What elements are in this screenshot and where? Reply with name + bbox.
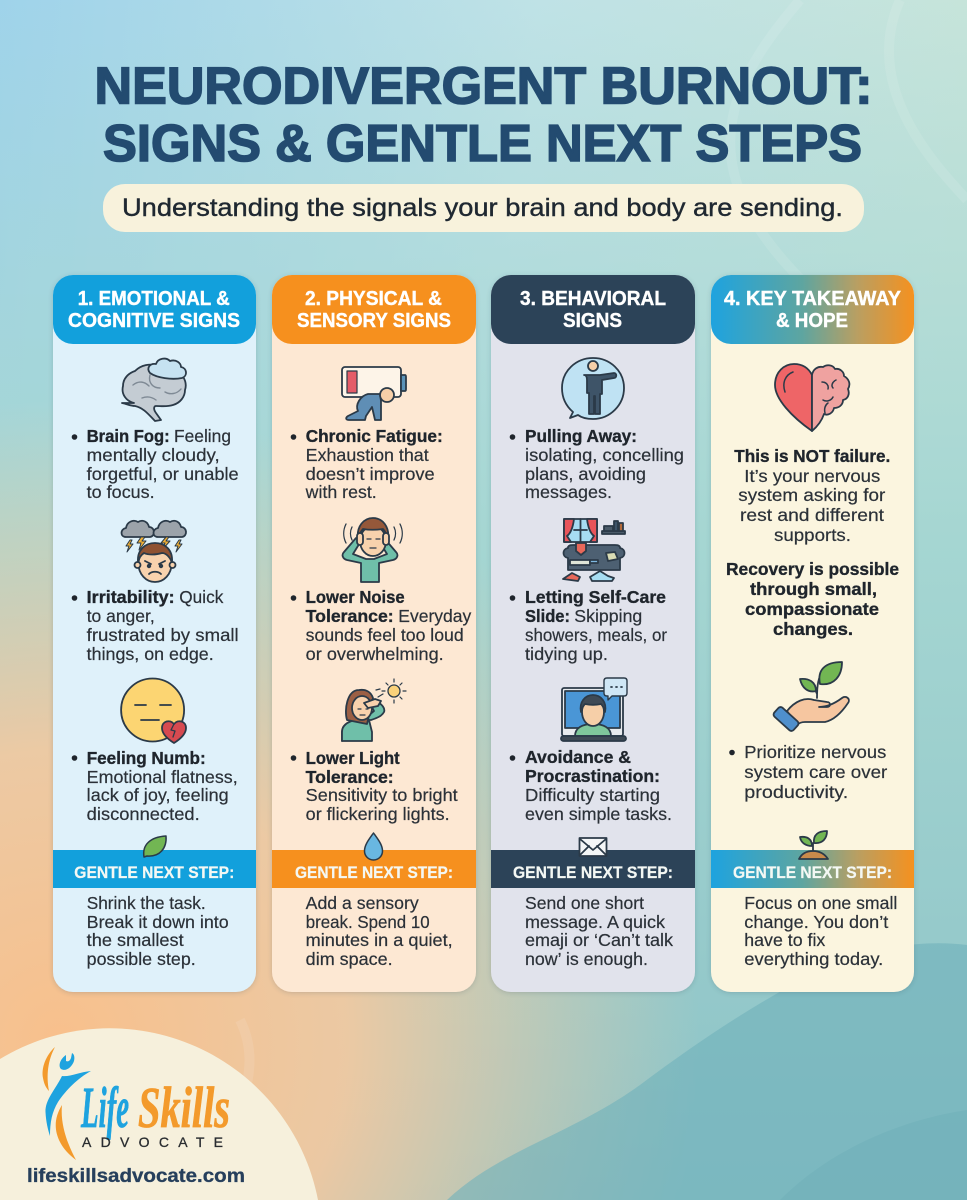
icon: speech bubble with person [562,358,624,419]
header: key takeaway [711,275,914,344]
text: recovery is possible [726,559,899,639]
text: lower noise tolerance: Everyday [398,606,472,626]
header: behavioral: SIGNS [563,310,622,332]
icon: person on computer screen [561,678,627,741]
text: chronic fatigue: Exhaustion that [306,445,429,465]
header: behavioral: 3. BEHAVIORAL [520,288,666,310]
text: lower light tolerance: Lower Light [306,748,400,768]
text: recovery is possible: Recovery is possible [726,559,899,579]
text: recovery is possible: changes. [773,619,853,639]
next step band: gradient [711,850,914,888]
text: lower noise tolerance [291,587,472,664]
text: letting self-care slide: Skipping [574,606,642,626]
subtitle pill: Understanding the signals your brain and body are sending. [122,194,843,222]
text: send one short message: message. A quick [525,912,665,932]
text: lower noise tolerance: Lower Noise [306,587,405,607]
text: letting self-care slide: showers, meals, or [525,625,667,645]
panel: physical and sensory signs [272,275,476,992]
title [94,58,872,173]
icon: angry head with storm clouds [122,521,186,582]
text: lower noise tolerance: or overwhelming. [306,644,444,664]
text: avoidance and procrastination: Avoidance & [525,747,631,767]
text: chronic fatigue: with rest. [305,482,377,502]
icon: envelope [580,838,606,856]
text: prioritize nervous system care: Prioritize nervous [744,742,887,762]
text: irritability: Irritability: [87,587,175,607]
text: add a sensory break: break. Spend 10 [306,912,430,932]
text: pulling away: isolating, concelling [525,445,684,465]
logo wordmark: Life Skills: Skills [138,1075,230,1140]
panel: key takeaway and hope [711,275,914,992]
text: pulling away: messages. [525,482,612,502]
text: brain fog: to focus. [87,482,155,502]
text: recovery is possible: through small, [750,579,877,599]
text: lower light tolerance [291,748,458,824]
header: physical and sensory [272,275,476,344]
text: brain fog [72,426,239,502]
text: shrink the task [87,893,229,969]
text: this is not failure: system asking for [738,485,885,505]
text: focus on one small change: everything today. [744,949,883,969]
icon: low battery and tired person [342,367,406,420]
text: pulling away: plans, avoiding [525,464,646,484]
text: recovery is possible: compassionate [745,599,879,619]
text: letting self-care slide: Letting Self-Care [525,587,666,607]
text: irritability: Quick [179,587,224,607]
text: focus on one small change [744,893,897,969]
text: this is not failure: rest and different [740,505,884,525]
text: feeling numb: lack of joy, feeling [87,785,229,805]
text: lower noise tolerance: sounds feel too loud [306,625,464,645]
logo wordmark: advocate: ADVOCATE [82,1134,223,1150]
website url: lifeskillsadvocate.com [27,1165,245,1187]
text: pulling away: Pulling Away: [525,426,637,446]
logo wordmark: Life Skills [81,1075,230,1140]
text: irritability: to anger, [87,606,155,626]
text: lower light tolerance: Sensitivity to bright [306,785,458,805]
header: key takeaway: 4. KEY TAKEAWAY [724,288,902,310]
subtitle pill [103,184,864,232]
text: prioritize nervous system care [729,742,887,802]
text: feeling numb: Emotional flatness, [87,767,238,787]
icon: messy couch and window [563,519,625,581]
icon: person shielding eyes from sun [342,679,406,741]
text: lower light tolerance: or flickering lights. [306,804,450,824]
text: shrink the task: the smallest [87,930,184,950]
text: shrink the task: Break it down into [87,912,229,932]
header: key takeaway: & HOPE [776,310,848,332]
text: focus on one small change: have to fix [744,930,826,950]
text: send one short message: emaji or ‘Can’t talk [525,930,673,950]
title: SIGNS & GENTLE NEXT STEPS [103,115,862,173]
next step band: dark: GENTLE NEXT STEP: [513,863,673,882]
icon: half heart half brain [775,364,849,431]
text: this is not failure: It’s your nervous [744,466,881,486]
text: add a sensory break: Add a sensory [306,893,419,913]
text: shrink the task: Shrink the task. [87,893,206,913]
text: lower light tolerance: Tolerance: [306,767,394,787]
icon: hand holding plant [772,662,849,732]
text: this is not failure: This is NOT failure. [734,446,890,466]
text: send one short message [525,893,673,969]
text: brain fog: Brain Fog: [87,426,170,446]
panel: emotional and cognitive signs [53,275,256,992]
title: NEURODIVERGENT BURNOUT: [94,58,872,116]
text: shrink the task: possible step. [87,949,196,969]
text: prioritize nervous system care: system care over [744,762,887,782]
text: this is not failure [734,446,890,545]
icon: person covering ears [343,518,402,582]
text: letting self-care slide: Slide: [525,606,570,626]
header: emotional and cognitive: 1. EMOTIONAL & [78,288,230,310]
text: prioritize nervous system care: productivity. [744,782,848,802]
text: irritability: frustrated by small [87,625,239,645]
next step band: blue [53,850,256,888]
next step band: orange [272,850,476,888]
text: feeling numb: disconnected. [87,804,200,824]
text: brain fog: Feeling [174,426,231,446]
text: avoidance and procrastination [510,747,672,824]
text: avoidance and procrastination: Difficulty starting [525,785,660,805]
text: lower noise tolerance: Tolerance: [306,606,394,626]
next step band: blue: GENTLE NEXT STEP: [74,863,234,882]
next step band: dark [491,850,695,888]
text: irritability [72,587,239,664]
text: chronic fatigue [291,426,443,502]
text: letting self-care slide: tidying up. [525,644,608,664]
panel: behavioral signs [491,275,695,992]
next step band: orange: GENTLE NEXT STEP: [295,863,453,882]
text: brain fog: mentally cloudy, [87,445,220,465]
icon: leaf [144,836,166,857]
header: behavioral [491,275,695,344]
text: avoidance and procrastination: Procrastination: [525,766,660,786]
text: add a sensory break [306,893,453,969]
text: feeling numb: Feeling Numb: [87,748,206,768]
next step band: gradient: GENTLE NEXT STEP: [733,863,892,882]
text: add a sensory break: minutes in a quiet, [306,930,453,950]
text: feeling numb [72,748,238,824]
text: focus on one small change: change. You don’t [744,912,888,932]
header: emotional and cognitive [53,275,256,344]
header: emotional and cognitive: COGNITIVE SIGNS [68,310,240,332]
text: this is not failure: supports. [774,525,851,545]
icon: foggy brain [122,359,186,421]
header: physical and sensory: SENSORY SIGNS [297,310,451,332]
text: add a sensory break: dim space. [306,949,393,969]
icon: water drop [364,833,382,860]
text: chronic fatigue: doesn’t improve [306,464,435,484]
logo badge [0,1028,318,1200]
text: irritability: things, on edge. [87,644,214,664]
text: pulling away [510,426,684,502]
text: chronic fatigue: Chronic Fatigue: [306,426,443,446]
text: letting self-care slide [510,587,667,664]
icon: numb face with broken heart [121,678,186,743]
icon: sprout [799,831,828,859]
text: avoidance and procrastination: even simple tasks. [525,804,672,824]
text: send one short message: Send one short [525,893,644,913]
logo wordmark: Life Skills: Life [81,1075,129,1140]
text: send one short message: now’ is enough. [525,949,648,969]
text: focus on one small change: Focus on one small [744,893,897,913]
icon: logo figure [43,1047,91,1160]
header: physical and sensory: 2. PHYSICAL & [305,288,442,310]
text: brain fog: forgetful, or unable [87,464,239,484]
